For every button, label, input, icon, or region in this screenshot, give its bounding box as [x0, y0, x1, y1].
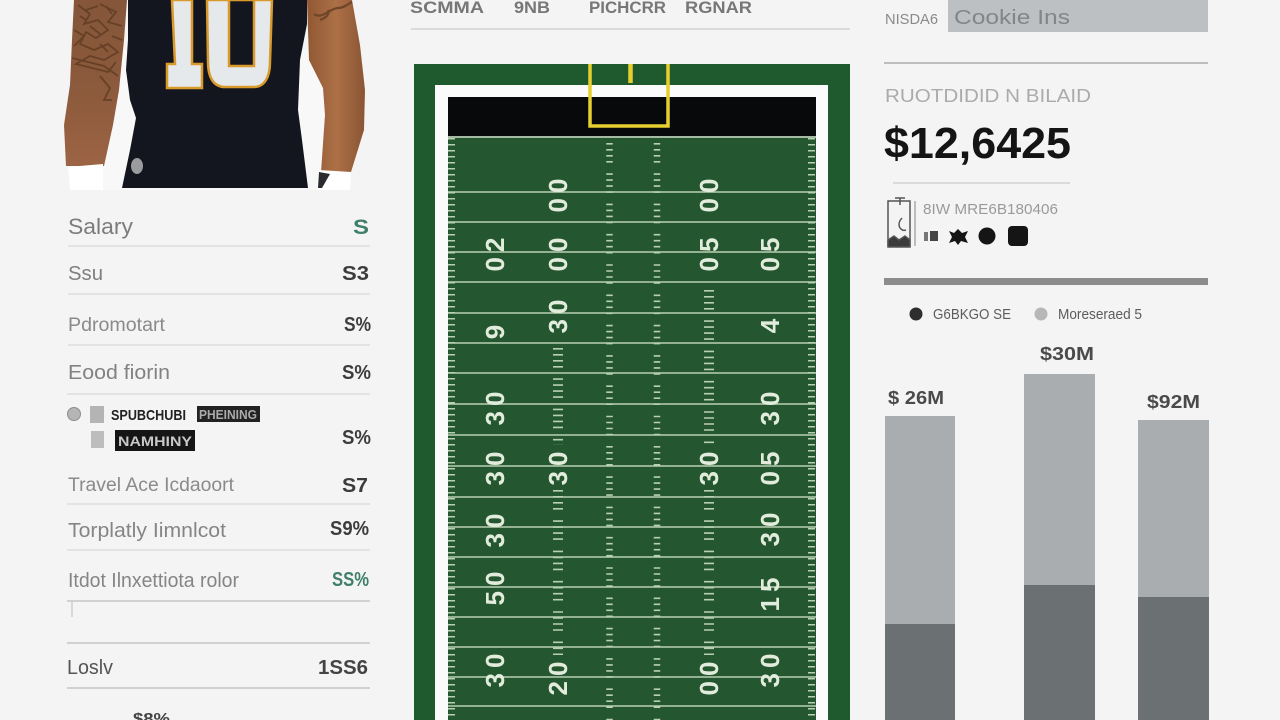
legend: G6BKGO SE — [933, 306, 1011, 323]
end zone — [448, 97, 816, 136]
row: sponsorship highlighted: S% — [342, 427, 371, 449]
panel: detail note with icon: 8IW MRE6B180406 — [923, 201, 1058, 218]
sideline ticks — [452, 138, 812, 720]
icon row — [924, 226, 1028, 246]
row: salary: S — [353, 216, 369, 239]
yard numbers: 30 — [755, 649, 785, 687]
yard numbers: 20 — [543, 657, 573, 695]
row: green total: Itdot Ilnxettiota rolor — [68, 570, 239, 592]
panel: top right search bar — [884, 0, 1208, 63]
right arm tattoo — [314, 2, 352, 20]
panel: headline figure: RUOTDIDID N BILAID — [885, 86, 1091, 106]
left arm — [64, 0, 127, 166]
row: green total: SS% — [332, 569, 369, 591]
jersey number 10 — [167, 0, 272, 88]
panel: top right search bar: Cookie Ins — [954, 7, 1070, 29]
panel: headline figure — [884, 86, 1091, 183]
yard numbers: 50 — [480, 567, 510, 605]
row: typically limited: S9% — [330, 518, 369, 540]
row: sponsorship highlighted: SPUBCHUBI — [111, 407, 186, 424]
yard numbers: 30 — [480, 387, 510, 425]
yard numbers: 00 — [543, 233, 573, 271]
row: promotional — [68, 314, 371, 336]
inner hash columns — [558, 290, 709, 655]
row: travel — [68, 475, 368, 497]
hash marks — [610, 143, 657, 720]
yard lines — [448, 192, 816, 706]
left wristband — [68, 164, 103, 190]
row: total — [67, 657, 368, 679]
row: food — [68, 362, 371, 384]
right arm — [307, 0, 365, 172]
row: second: Ssu — [68, 263, 103, 285]
yard numbers: 4 — [755, 318, 785, 333]
row: food: S% — [342, 362, 371, 384]
row: sponsorship highlighted — [68, 406, 371, 451]
panel: detail note with icon — [884, 198, 1208, 285]
yard numbers — [480, 174, 785, 695]
row: food: Eood fiorin — [68, 362, 170, 384]
row: typically limited: Torplatly Iimnlcot — [68, 520, 226, 542]
panel: top right search bar: NISDA6 — [885, 11, 938, 28]
icon: document — [888, 198, 915, 247]
row: salary: Salary — [68, 214, 133, 239]
yard numbers: 9 — [480, 325, 510, 339]
bar 1: $ 26M — [888, 388, 944, 408]
row: travel: S7 — [342, 475, 368, 497]
row: second: S3 — [342, 263, 369, 285]
yard numbers: 30 — [694, 447, 724, 485]
yard numbers: 30 — [480, 447, 510, 485]
row: total: Loslv — [67, 657, 113, 679]
yard numbers: 05 — [755, 233, 785, 271]
yard numbers: 30 — [480, 649, 510, 687]
yard numbers: 00 — [543, 174, 573, 212]
panel: salary table — [67, 214, 371, 720]
yard numbers: 05 — [694, 233, 724, 271]
yard numbers: 30 — [755, 387, 785, 425]
bar 3: $92M — [1147, 392, 1200, 412]
row: typically limited — [68, 518, 369, 542]
yard numbers: 15 — [755, 573, 785, 611]
yard numbers: 30 — [755, 508, 785, 546]
row: salary — [68, 214, 369, 239]
yard numbers: 02 — [480, 233, 510, 271]
panel: headline figure: $12,6425 — [884, 119, 1071, 168]
chart: football field — [414, 64, 850, 720]
bar 3 — [1138, 392, 1209, 720]
bar 1 — [885, 388, 955, 720]
bar 2 — [1024, 344, 1095, 720]
yard numbers: 05 — [755, 447, 785, 485]
row: second — [68, 263, 369, 285]
heading: field column tabs — [410, 0, 850, 29]
legend — [910, 306, 1142, 323]
goalpost — [590, 64, 668, 126]
jersey logo — [131, 158, 143, 174]
bar 2: $30M — [1040, 344, 1094, 364]
row: total: 1SS6 — [318, 657, 368, 679]
yard numbers: 30 — [480, 509, 510, 547]
row: sponsorship highlighted: PHEINING — [199, 407, 257, 422]
left arm tattoo — [72, 4, 122, 100]
row: promotional: Pdromotart — [68, 315, 166, 336]
row: promotional: S% — [344, 314, 371, 336]
panel: player photo — [64, 0, 365, 190]
right wristband — [317, 170, 351, 190]
yard numbers: 30 — [543, 447, 573, 485]
chart: stacked bar chart — [885, 306, 1209, 720]
row: green total — [68, 569, 369, 592]
field turf — [448, 136, 816, 720]
legend: Moreseraed 5 — [1058, 306, 1142, 323]
row: sponsorship highlighted: NAMHINY — [118, 433, 193, 449]
yard numbers: 00 — [694, 174, 724, 212]
row: travel: Travel Ace Icdaoort — [68, 475, 235, 496]
jersey — [122, 0, 308, 188]
yard numbers: 00 — [694, 657, 724, 695]
yard numbers: 30 — [543, 295, 573, 333]
